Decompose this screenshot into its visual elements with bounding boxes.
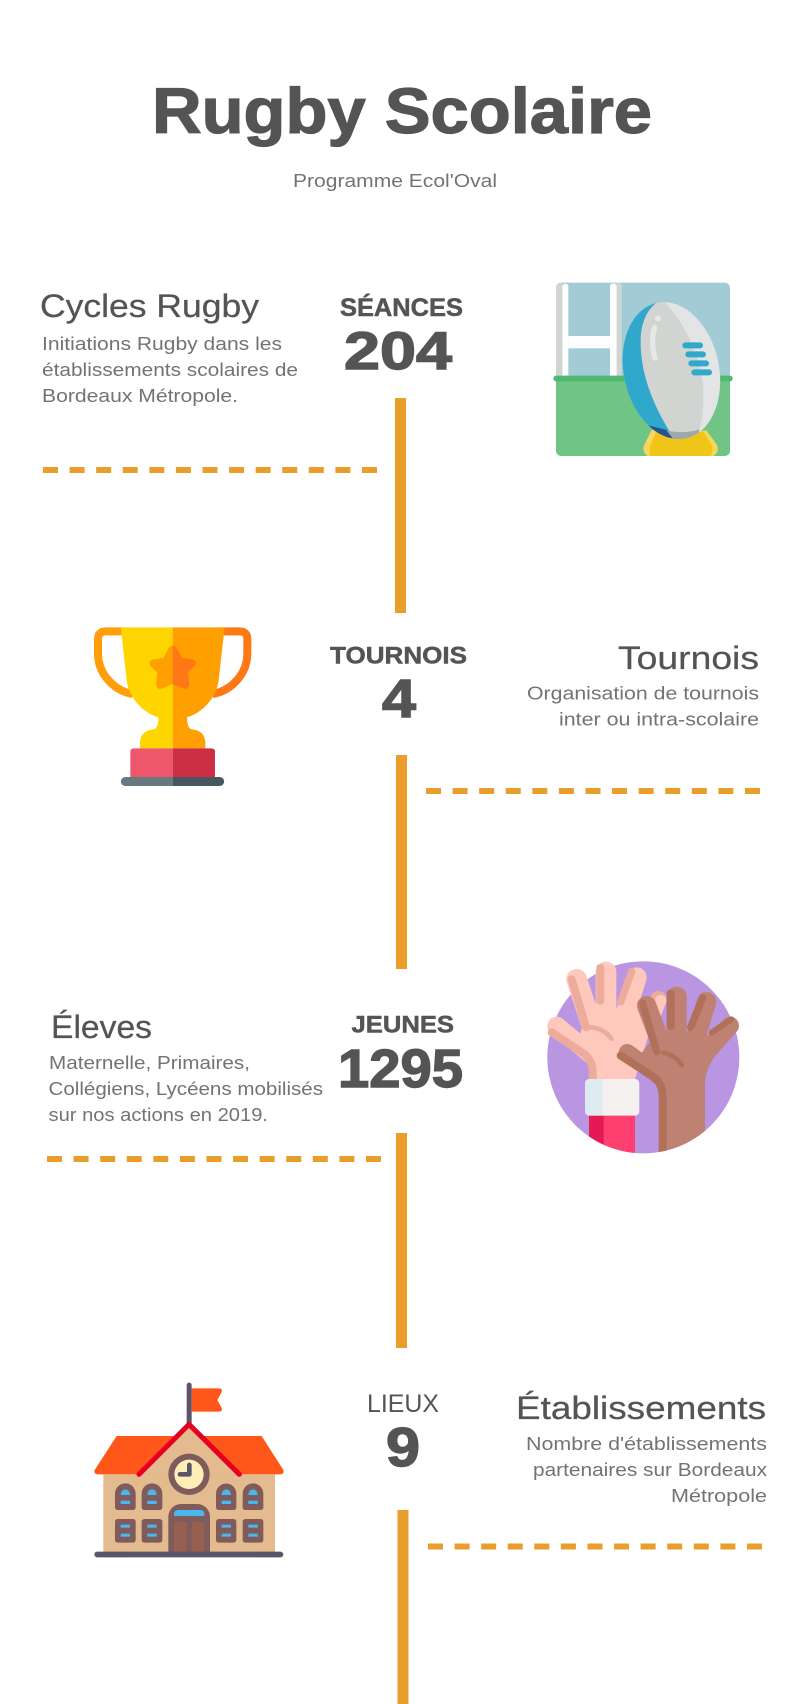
description: éleves bbox=[48, 1052, 323, 1125]
description: établissements: partenaires sur Bordeaux bbox=[533, 1459, 768, 1480]
description: établissements: Nombre d'établissements bbox=[526, 1433, 767, 1454]
stat: lieux 9: LIEUX bbox=[367, 1390, 439, 1418]
timeline bar 1 bbox=[395, 398, 406, 613]
description: cycles rugby bbox=[42, 333, 298, 406]
stat: tournois 4 bbox=[330, 642, 467, 729]
dashed line 3 bbox=[47, 1156, 381, 1162]
timeline bar 4 bbox=[398, 1510, 408, 1704]
description: éleves: sur nos actions en 2019. bbox=[48, 1104, 268, 1125]
heading: cycles rugby: Cycles Rugby bbox=[40, 288, 259, 324]
heading: éleves: Éleves bbox=[51, 1009, 152, 1045]
description: tournois bbox=[527, 682, 759, 730]
stat: tournois 4: TOURNOIS bbox=[330, 642, 467, 670]
stat: jeunes 1295 bbox=[338, 1012, 463, 1099]
description: tournois: Organisation de tournois bbox=[527, 682, 759, 704]
title: Rugby Scolaire bbox=[152, 75, 652, 147]
dashed line 1 bbox=[43, 467, 377, 473]
heading: tournois: Tournois bbox=[618, 640, 759, 676]
section: établissements text bbox=[516, 1390, 768, 1506]
dashed line 2 bbox=[426, 788, 760, 794]
stat: lieux 9: 9 bbox=[386, 1416, 420, 1478]
stat: jeunes 1295: 1295 bbox=[338, 1039, 463, 1099]
subtitle: Programme Ecol'Oval bbox=[293, 170, 497, 191]
stat: séances 204: SÉANCES bbox=[340, 293, 463, 322]
section: cycles rugby text bbox=[40, 288, 298, 406]
description: établissements: Métropole bbox=[671, 1485, 767, 1506]
stat: séances 204 bbox=[340, 293, 463, 381]
description: cycles rugby: Initiations Rugby dans les bbox=[42, 333, 282, 354]
description: cycles rugby: Bordeaux Métropole. bbox=[42, 385, 238, 406]
icon: rugby ball on field bbox=[553, 283, 733, 456]
heading: établissements: Établissements bbox=[516, 1390, 766, 1426]
icon: school building bbox=[94, 1383, 284, 1557]
icon: trophy bbox=[98, 627, 247, 786]
stat: séances 204: 204 bbox=[344, 322, 453, 381]
description: éleves: Collégiens, Lycéens mobilisés bbox=[48, 1078, 323, 1099]
stat: jeunes 1295: JEUNES bbox=[352, 1012, 454, 1038]
dashed line 4 bbox=[428, 1544, 762, 1550]
timeline bar 2 bbox=[396, 755, 407, 969]
stat: lieux 9 bbox=[367, 1390, 439, 1478]
stat: tournois 4: 4 bbox=[382, 669, 416, 729]
description: éleves: Maternelle, Primaires, bbox=[49, 1052, 250, 1073]
description: tournois: inter ou intra-scolaire bbox=[559, 708, 759, 730]
description: établissements bbox=[526, 1433, 768, 1506]
timeline bar 3 bbox=[396, 1133, 407, 1348]
icon: raised hands bbox=[547, 961, 739, 1157]
section: tournois text bbox=[527, 640, 759, 730]
section: éleves text bbox=[48, 1009, 323, 1125]
description: cycles rugby: établissements scolaires de bbox=[42, 359, 298, 380]
